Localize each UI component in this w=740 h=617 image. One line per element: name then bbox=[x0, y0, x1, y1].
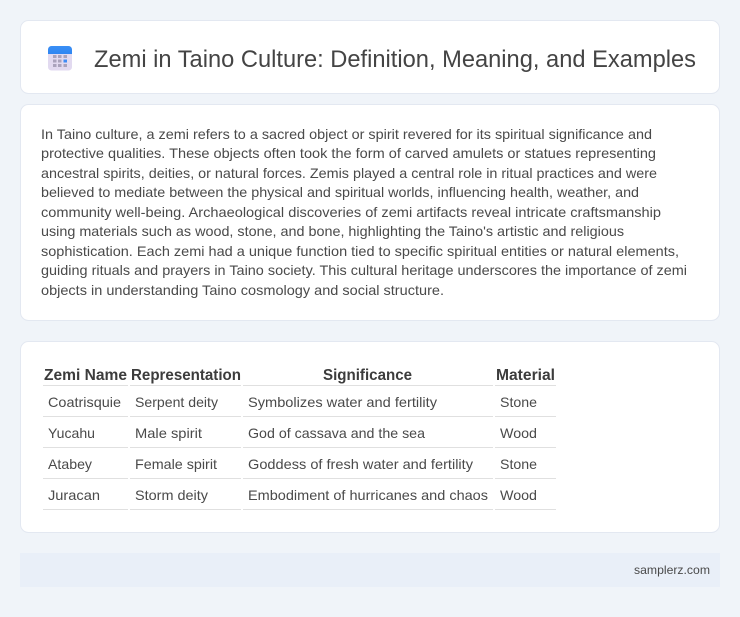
text block: description paragraph: In Taino culture, a zemi refers to a sacred object or spirit revered for its spiritual significance and bbox=[41, 126, 652, 142]
text block: description paragraph bbox=[41, 126, 687, 298]
icon: calendar bbox=[48, 46, 72, 70]
table rows: Storm deity bbox=[135, 487, 208, 503]
table header: Material bbox=[496, 367, 555, 384]
title: Zemi in Taino Culture: Definition, Meaning, and Examples bbox=[94, 46, 696, 73]
table rows: Juracan bbox=[48, 487, 100, 503]
table rows: Wood bbox=[500, 487, 537, 503]
table rows: Stone bbox=[500, 456, 537, 472]
table rows: Wood bbox=[500, 425, 537, 441]
table header bbox=[44, 367, 555, 384]
table header: Representation bbox=[131, 367, 241, 384]
panel: table bbox=[20, 342, 720, 532]
table rows: Serpent deity bbox=[135, 394, 218, 410]
footer text: samplerz.com bbox=[634, 563, 710, 577]
table rows: Female spirit bbox=[135, 456, 217, 472]
text block: description paragraph: community well-being. Archaeological discoveries of zemi artifacts reveal intricate craftsmanship bbox=[41, 204, 661, 220]
panel: description bbox=[20, 104, 720, 320]
text block: description paragraph: believed to mediate between the physical and spiritual worlds, influencing health, weather, and bbox=[41, 184, 639, 200]
text block: description paragraph: protective qualities. These objects often took the form of carved amulets or statues representing bbox=[41, 145, 656, 161]
text block: description paragraph: guiding rituals and prayers in Taino society. This cultural heritage underscores the importance of zemi bbox=[41, 262, 687, 278]
table header: Zemi Name bbox=[44, 367, 127, 384]
text block: description paragraph: sophistication. Each zemi had a unique function tied to specific spiritual entities or natural elements, bbox=[41, 243, 679, 259]
table header: Significance bbox=[323, 367, 412, 384]
text block: description paragraph: objects in understanding Taino cosmology and social structure. bbox=[41, 282, 444, 298]
table rows: Goddess of fresh water and fertility bbox=[248, 456, 473, 472]
text block: description paragraph: ancestral spirits, deities, or natural forces. Zemis played a central role in ritual practices and were bbox=[41, 165, 657, 181]
table rows: Male spirit bbox=[135, 425, 202, 441]
panel: title header bbox=[20, 20, 720, 94]
table rows bbox=[43, 386, 556, 510]
table rows: God of cassava and the sea bbox=[248, 425, 425, 441]
table rows: Yucahu bbox=[48, 425, 95, 441]
table rows: Stone bbox=[500, 394, 537, 410]
table rows: Embodiment of hurricanes and chaos bbox=[248, 487, 488, 503]
table rows: Symbolizes water and fertility bbox=[248, 394, 437, 410]
table rows: Atabey bbox=[48, 456, 92, 472]
text block: description paragraph: using materials such as wood, stone, and bone, highlighting the Taino's artistic and religious bbox=[41, 223, 624, 239]
table rows: Coatrisquie bbox=[48, 394, 121, 410]
footer bar bbox=[20, 553, 720, 587]
